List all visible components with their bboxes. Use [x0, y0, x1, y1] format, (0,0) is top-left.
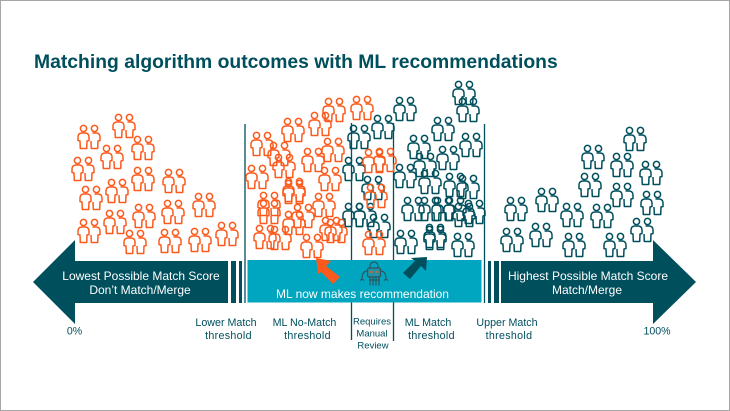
- ML recommendation bar: ML now makes recommendation: [276, 287, 449, 301]
- label: ML match threshold: ML Match: [405, 317, 451, 329]
- label: requires manual review: Requires: [353, 316, 391, 328]
- label: requires manual review: Review: [357, 340, 389, 352]
- arrow: orange toward no-match: [316, 258, 340, 284]
- label: 0%: 0%: [67, 326, 83, 338]
- arrow: teal toward match: [403, 257, 427, 279]
- label: ML no-match threshold: ML No-Match: [273, 317, 336, 329]
- people: high score teal group: [501, 127, 663, 257]
- title: Matching algorithm outcomes with ML recommendations: [34, 52, 558, 73]
- right arrow: [488, 240, 696, 324]
- people: manual review teal group: [343, 115, 394, 238]
- threshold lines: [245, 123, 484, 341]
- right arrow: Match/Merge: [552, 283, 622, 297]
- label: upper match threshold: Upper Match: [476, 317, 538, 329]
- label: 100%: 100%: [643, 326, 671, 338]
- label: lower match threshold: Lower Match: [195, 317, 257, 329]
- people: manual review orange group: [363, 148, 396, 254]
- label: upper match threshold: threshold: [486, 330, 532, 342]
- label: ML match threshold: threshold: [408, 330, 455, 342]
- people: ML match teal group: [394, 81, 485, 257]
- left arrow: Don’t Match/Merge: [89, 283, 191, 297]
- ML recommendation bar: [248, 260, 482, 302]
- people: low score orange group: [72, 114, 238, 254]
- icon: robot: [360, 262, 388, 286]
- right arrow: Highest Possible Match Score: [508, 269, 668, 283]
- label: lower match threshold: threshold: [205, 330, 252, 342]
- label: requires manual review: Manual: [356, 328, 388, 340]
- label: ML no-match threshold: threshold: [284, 330, 331, 342]
- people: ML no-match orange group: [246, 96, 373, 258]
- left arrow: [33, 240, 242, 324]
- left arrow: Lowest Possible Match Score: [62, 269, 220, 283]
